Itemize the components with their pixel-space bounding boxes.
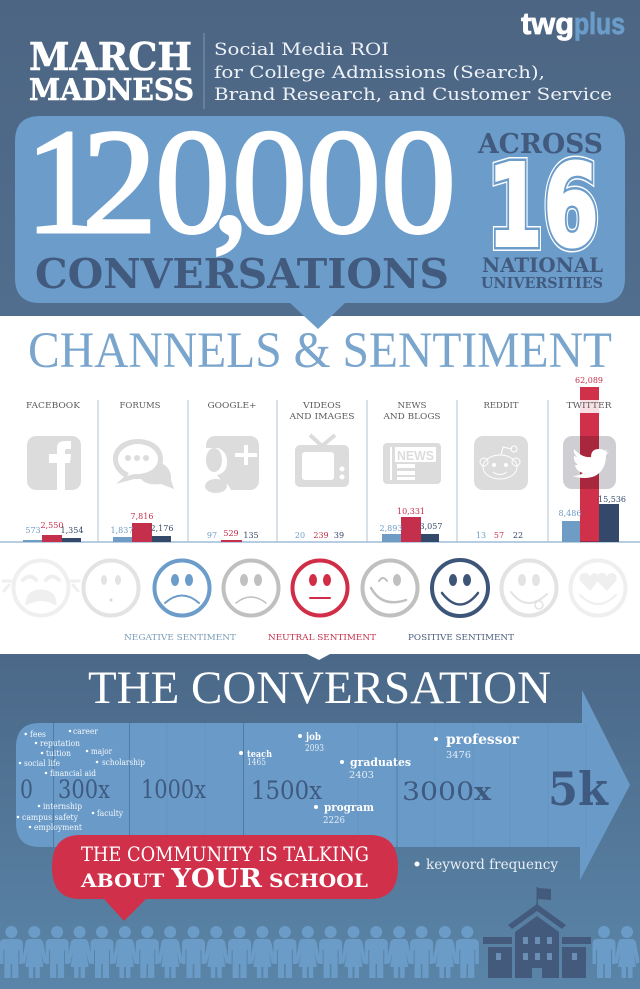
frequency arrow: [16, 690, 630, 880]
column: news and blogs: 2,893: [380, 524, 402, 533]
column: forums: 1,837: [111, 526, 133, 535]
small keywords: social life: [24, 759, 60, 768]
big number: 120,000: [25, 99, 456, 265]
top keywords with counts: 2226: [323, 816, 345, 826]
column: facebook: 1,354: [61, 526, 83, 535]
subtitle: [204, 33, 612, 109]
top keywords with counts: 1465: [247, 758, 266, 768]
column: reddit: REDDIT: [484, 401, 519, 410]
face: tongue: [502, 560, 556, 616]
logo: twgplus: plus: [574, 6, 625, 41]
column: facebook: 2,550: [41, 521, 63, 530]
column: reddit: 22: [513, 531, 523, 540]
small keywords: fees: [30, 730, 46, 739]
face: positive sentiment: [432, 560, 488, 616]
small keywords: major: [91, 747, 112, 756]
callout: community speech bubble: ABOUT YOUR SCHOOL: [80, 864, 368, 894]
face: sad: [224, 560, 278, 616]
conversations label: CONVERSATIONS: [35, 250, 449, 298]
subtitle: for College Admissions (Search),: [214, 63, 545, 83]
column: news and blogs: NEWS: [397, 449, 434, 463]
callout: community speech bubble: [52, 835, 398, 921]
column: videos and images: [288, 401, 354, 540]
face: crying: [3, 560, 79, 616]
sentiment faces row: [3, 560, 626, 616]
column: twitter: 8,486: [559, 509, 581, 518]
small keywords: financial aid: [50, 769, 96, 778]
column: news and blogs: 3,057: [420, 522, 442, 531]
column: news and blogs: 10,331: [397, 507, 425, 516]
column: facebook: FACEBOOK: [26, 401, 81, 410]
column: forums: 7,816: [131, 512, 153, 521]
header background: [0, 0, 640, 316]
face: heart eyes: [570, 560, 626, 616]
column: videos and images: 20: [295, 531, 305, 540]
top keywords with counts: job: [305, 731, 321, 743]
top keywords with counts: program: [324, 801, 374, 814]
sentiment legend: NEGATIVE SENTIMENT: [124, 633, 236, 643]
scale labels: 5k: [548, 762, 609, 816]
column: twitter: 15,536: [598, 495, 626, 504]
face: neutral sentiment: [292, 560, 348, 616]
column: videos and images: 239: [313, 531, 329, 540]
sentiment legend: POSITIVE SENTIMENT: [408, 633, 514, 643]
small keywords: scholarship: [102, 758, 145, 767]
column: google plus: GOOGLE+: [208, 401, 256, 410]
across label: ACROSS: [477, 129, 603, 160]
crowd of students: [0, 926, 639, 978]
small keywords: employment: [34, 823, 83, 832]
scale labels: 0: [20, 775, 33, 804]
column: videos and images: 39: [334, 531, 344, 540]
logo: twgplus: [521, 6, 625, 41]
column: forums: [111, 401, 174, 542]
title: March Madness: MADNESS: [29, 73, 194, 108]
legend: keyword frequency: keyword frequency: [426, 857, 558, 873]
sentiment legend: NEUTRAL SENTIMENT: [268, 633, 376, 643]
column: news and blogs: NEWS: [398, 401, 426, 410]
subtitle: Brand Research, and Customer Service: [214, 85, 612, 105]
face: negative sentiment: [154, 560, 210, 616]
national universities label: NATIONAL: [482, 253, 603, 277]
subtitle: Social Media ROI: [214, 40, 389, 60]
small keywords: campus safety: [22, 813, 78, 822]
small keywords: [18, 727, 145, 832]
top keywords with counts: 3476: [446, 751, 471, 761]
scale labels: 300x: [58, 775, 110, 804]
column: google plus: 97: [207, 531, 217, 540]
face: wink: [362, 560, 418, 616]
heading: channels and sentiment: CHANNELS & SENTIMENT: [28, 323, 612, 379]
column: facebook: 573: [25, 526, 41, 535]
sentiment legend: [124, 633, 514, 643]
channel chart: [0, 376, 640, 542]
logo: twgplus: twg: [521, 6, 574, 41]
column: videos and images: AND IMAGES: [288, 412, 354, 421]
scale labels: 1000x: [141, 775, 206, 804]
face: surprised: [84, 560, 138, 616]
column: reddit: 57: [494, 531, 504, 540]
top keywords with counts: teach: [247, 749, 272, 760]
column: twitter: TWITTER: [566, 401, 613, 410]
title: March Madness: MARCH: [29, 34, 192, 79]
column: forums: 2,176: [151, 524, 173, 533]
top keywords with counts: 2403: [349, 771, 374, 781]
scale labels: 1500x: [251, 776, 322, 805]
headline speech bubble: UNIVERSITIES: [481, 274, 603, 292]
conversation section background: [0, 654, 640, 989]
top keywords with counts: 2093: [305, 744, 324, 754]
column: reddit: [474, 401, 528, 540]
column: news and blogs: [380, 401, 442, 542]
column: twitter: 62,089: [575, 376, 603, 385]
small keywords: reputation: [40, 739, 80, 748]
scale labels: [20, 762, 609, 816]
top keywords with counts: [241, 731, 520, 826]
column: facebook: [23, 401, 83, 542]
callout: community speech bubble: THE COMMUNITY IS TALKING: [81, 842, 369, 866]
title: March Madness: [29, 34, 194, 108]
headline speech bubble: [15, 99, 625, 329]
column: google plus: 135: [243, 531, 259, 540]
column: reddit: 13: [476, 531, 486, 540]
small keywords: tuition: [46, 749, 71, 758]
small keywords: career: [73, 727, 98, 736]
top keywords with counts: professor: [446, 732, 520, 748]
column: twitter: [559, 376, 626, 542]
small keywords: faculty: [97, 809, 123, 818]
top keywords with counts: graduates: [350, 756, 411, 769]
column: news and blogs: AND BLOGS: [382, 412, 440, 421]
icon: school building: [483, 887, 591, 978]
column: forums: FORUMS: [120, 401, 160, 410]
scale labels: 3000 x: [402, 777, 492, 806]
heading: the conversation: THE CONVERSATION: [88, 662, 551, 714]
column: google plus: [205, 401, 259, 542]
column: videos and images: VIDEOS: [302, 401, 341, 410]
small keywords: internship: [43, 802, 82, 811]
column: google plus: 529: [223, 529, 239, 538]
